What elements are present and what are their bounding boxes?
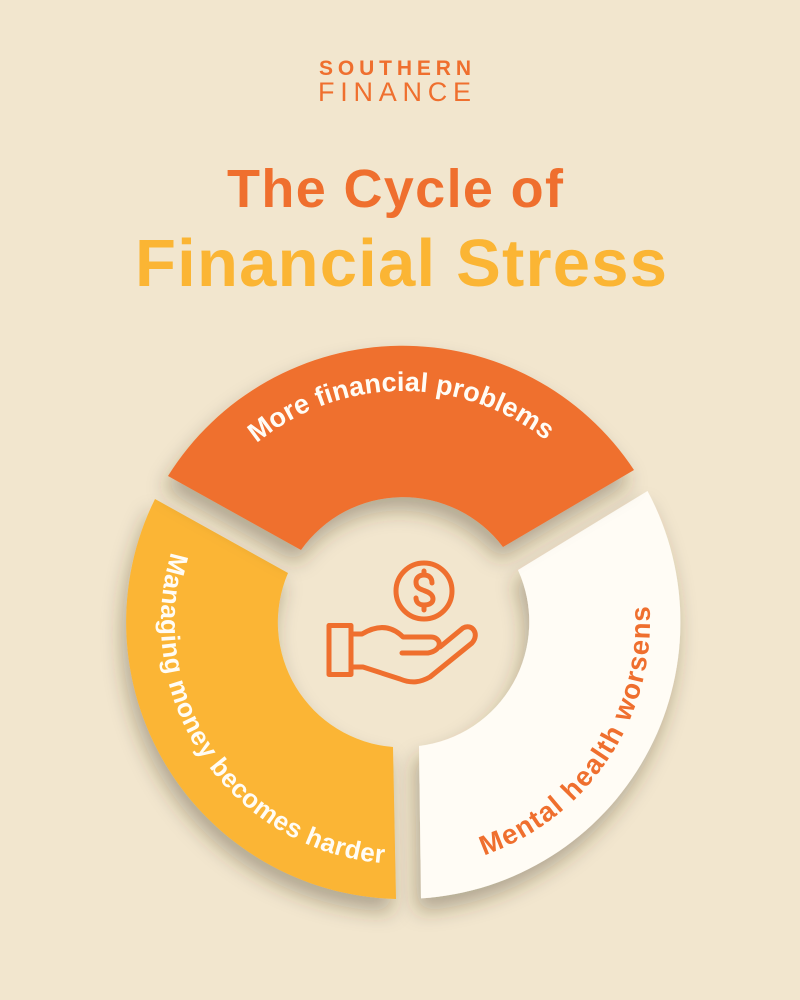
title: [135, 159, 667, 301]
segment: mental health worsens: [403, 491, 689, 922]
icon: coin: [396, 563, 452, 619]
icon: hand holding coin: [329, 563, 475, 682]
logo: Southern: SOUTHERN: [319, 57, 471, 80]
title line 1: The Cycle of: [227, 159, 564, 219]
cycle diagram: [110, 346, 689, 924]
segment: more financial problems: [157, 346, 637, 571]
logo: [318, 57, 471, 107]
icon: hand: [351, 627, 475, 682]
title line 2: Financial Stress: [135, 226, 667, 301]
label: mental health: Mental health worsens: [478, 607, 650, 855]
label: more financial: More financial problems: [246, 371, 552, 442]
label: managing money: Managing money becomes harder: [156, 554, 385, 863]
logo: Finance: FINANCE: [318, 77, 471, 107]
icon: cuff: [329, 626, 351, 674]
segment: managing money becomes harder: [110, 499, 404, 924]
